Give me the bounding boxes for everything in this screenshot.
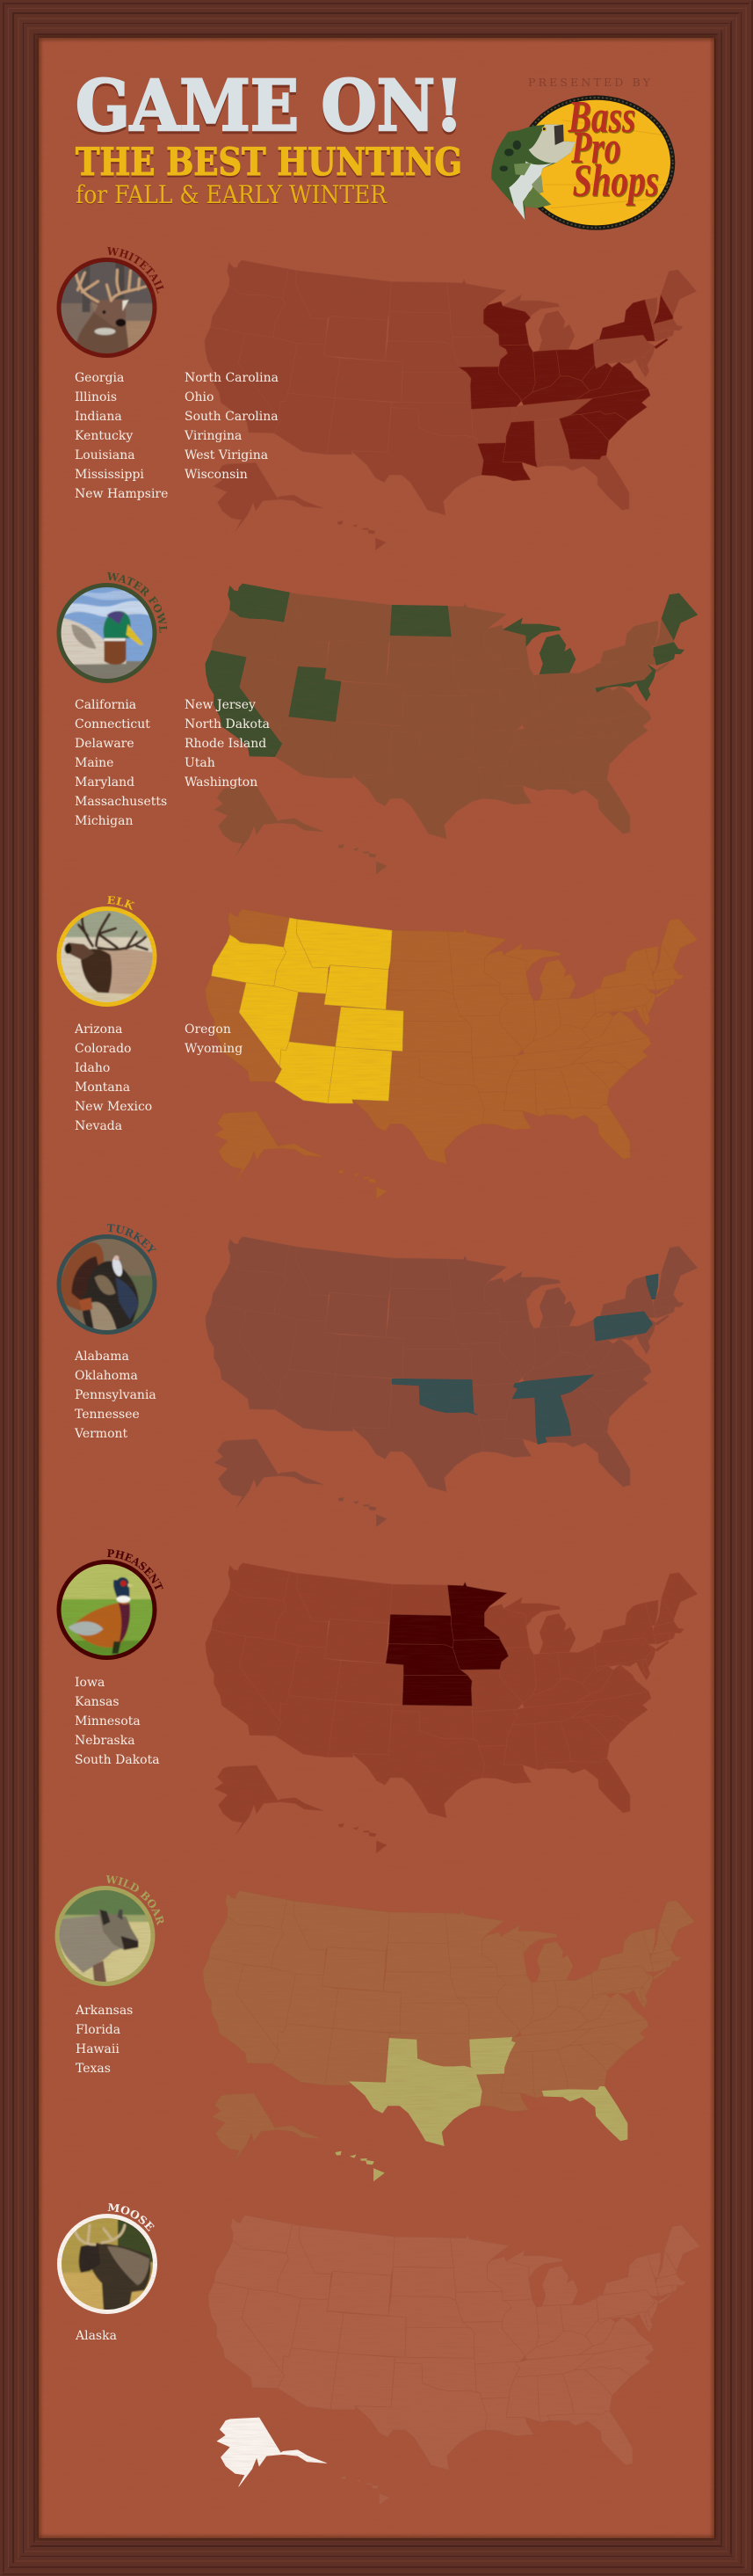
list: elk states: New Mexico xyxy=(75,1100,152,1114)
list: pheasant states: Minnesota xyxy=(75,1714,141,1728)
icon: moose medallion xyxy=(57,2214,157,2314)
subtitle: the best hunting: THE BEST HUNTING xyxy=(76,141,462,185)
list: turkey states xyxy=(74,1350,156,1441)
list: whitetail states: Illinois xyxy=(75,390,117,404)
list: elk states: Idaho xyxy=(75,1061,110,1075)
icon: pheasant medallion xyxy=(56,1560,156,1660)
list: elk states: Colorado xyxy=(75,1042,131,1056)
list: elk states: Arizona xyxy=(74,1022,122,1037)
list: wild boar states: Florida xyxy=(76,2023,120,2037)
list: water fowl states xyxy=(75,698,270,828)
list: elk states xyxy=(74,1022,243,1133)
list: water fowl states: Maine xyxy=(75,756,113,770)
section: moose xyxy=(57,2203,699,2504)
icon: turkey medallion xyxy=(56,1234,156,1335)
list: elk states: Nevada xyxy=(75,1119,122,1133)
list: water fowl states: Utah xyxy=(185,756,215,770)
list: water fowl states: California xyxy=(75,698,136,712)
section: water fowl xyxy=(56,571,698,874)
section: pheasant xyxy=(56,1549,698,1853)
icon: whitetail medallion xyxy=(56,258,156,358)
list: water fowl states: Delaware xyxy=(75,737,134,751)
list: whitetail states: Louisiana xyxy=(75,448,135,462)
section: wild boar xyxy=(54,1874,694,2182)
list: whitetail states: New Hampsire xyxy=(75,487,168,501)
list: water fowl states: New Jersey xyxy=(185,698,256,712)
label: water fowl: WATER FOWL xyxy=(107,571,167,633)
list: water fowl states: Connecticut xyxy=(75,717,150,731)
label: turkey: TURKEY xyxy=(107,1224,156,1254)
list: pheasant states: Nebraska xyxy=(75,1734,135,1748)
list: whitetail states: Kentucky xyxy=(75,429,133,443)
list: pheasant states: South Dakota xyxy=(75,1753,160,1767)
list: elk states: Oregon xyxy=(185,1022,231,1037)
list: water fowl states: Michigan xyxy=(75,814,133,828)
icon: elk medallion xyxy=(56,906,156,1007)
map: whitetail states xyxy=(205,260,697,550)
map: pheasant states xyxy=(206,1563,698,1853)
label: elk: ELK xyxy=(107,896,135,911)
list: elk states: Wyoming xyxy=(185,1042,243,1056)
list: whitetail states: West Virigina xyxy=(185,448,268,462)
list: water fowl states: Washington xyxy=(185,775,257,790)
label: wild boar: WILD BOAR xyxy=(105,1874,163,1925)
list: turkey states: Tennessee xyxy=(75,1408,140,1422)
title: game on: GAME ON! xyxy=(76,64,463,147)
list: water fowl states: Massachusetts xyxy=(75,795,167,809)
section: elk xyxy=(56,896,698,1199)
map: elk states xyxy=(206,909,698,1199)
list: water fowl states: Rhode Island xyxy=(185,737,266,751)
list: whitetail states: Georgia xyxy=(75,371,124,385)
map: moose states xyxy=(208,2216,700,2506)
logo: bass pro shops: Bass xyxy=(568,92,635,142)
text: presented by: PRESENTED BY xyxy=(528,76,651,89)
list: whitetail states: North Carolina xyxy=(185,371,279,385)
list: wild boar states: Texas xyxy=(76,2062,111,2076)
list: wild boar states: Arkansas xyxy=(75,2004,133,2018)
list: moose states: Alaska xyxy=(75,2329,117,2343)
icon: wild boar medallion xyxy=(54,1886,155,1986)
list: whitetail states: Indiana xyxy=(75,410,122,424)
list: water fowl states: North Dakota xyxy=(185,717,270,731)
subtitle: season: for FALL & EARLY WINTER xyxy=(76,180,387,209)
map: water fowl states xyxy=(206,584,698,874)
list: turkey states: Pennsylvania xyxy=(75,1388,156,1402)
label: whitetail: WHITETAIL xyxy=(107,247,163,294)
logo: bass pro shops: Shops xyxy=(573,156,659,207)
list: turkey states: Alabama xyxy=(74,1350,129,1364)
list: pheasant states xyxy=(75,1676,160,1767)
list: whitetail states: South Carolina xyxy=(185,410,279,424)
map: wild boar states xyxy=(203,1891,695,2181)
list: turkey states: Oklahoma xyxy=(75,1369,138,1383)
list: wild boar states: Hawaii xyxy=(76,2042,119,2056)
list: whitetail states: Wisconsin xyxy=(185,468,248,482)
section: whitetail xyxy=(56,209,697,550)
label: moose: MOOSE xyxy=(107,2203,155,2231)
list: whitetail states: Ohio xyxy=(185,390,214,404)
label: pheasant: PHEASENT xyxy=(107,1549,163,1590)
list: whitetail states: Mississippi xyxy=(75,468,144,482)
icon: water fowl medallion xyxy=(56,583,156,683)
list: water fowl states: Maryland xyxy=(75,775,134,790)
map: turkey states xyxy=(206,1237,698,1527)
list: pheasant states: Kansas xyxy=(75,1695,119,1709)
icon: leaping bass xyxy=(491,125,576,220)
list: whitetail states: Viringina xyxy=(184,429,242,443)
list: turkey states: Vermont xyxy=(74,1427,128,1441)
list: pheasant states: Iowa xyxy=(75,1676,105,1690)
list: wild boar states xyxy=(75,2004,133,2076)
logo: bass pro shops: Pro xyxy=(570,123,621,173)
list: whitetail states xyxy=(75,371,279,501)
list: elk states: Montana xyxy=(75,1081,130,1095)
section: turkey xyxy=(56,1224,698,1527)
logo: bass pro shops xyxy=(491,92,673,228)
